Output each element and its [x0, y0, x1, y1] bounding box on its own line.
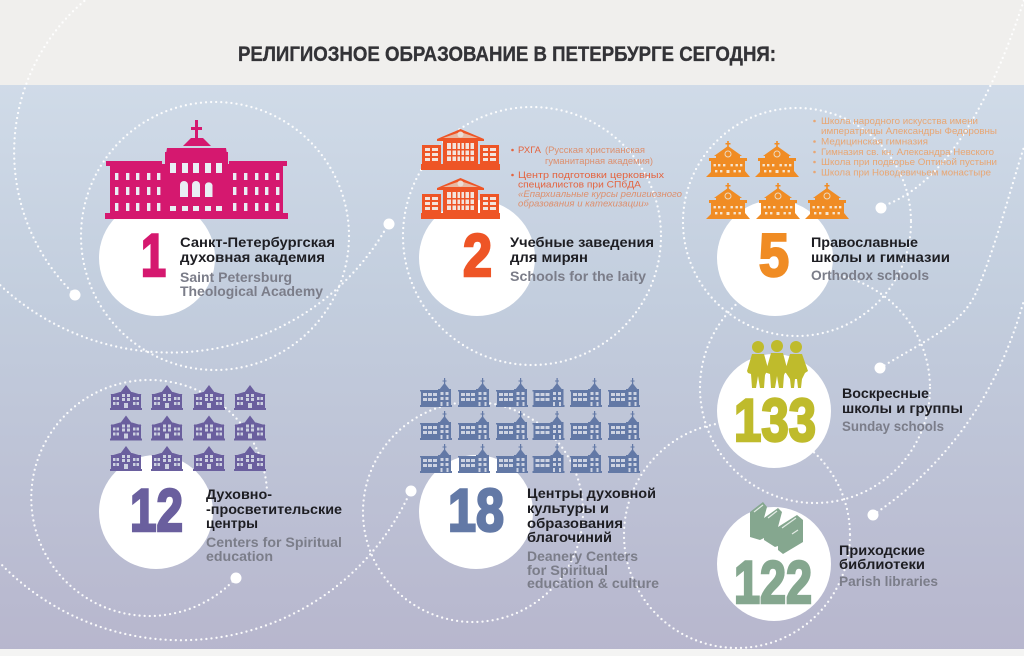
list: orthodox schools: Гимназия св. кн. Александра Невского: [821, 147, 994, 158]
label: laity: Schools for the laity: [510, 268, 646, 284]
label: academy: [180, 234, 335, 299]
list: laity schools: гуманитарная академия): [545, 156, 653, 167]
label: laity: Учебные заведения: [510, 234, 654, 250]
label: libraries: [839, 542, 938, 589]
label: academy: Санкт-Петербургская: [180, 234, 335, 250]
label: libraries: библиотеки: [839, 556, 925, 572]
label: sunday: Sunday schools: [842, 418, 944, 434]
white circle 122: [717, 507, 831, 621]
list: laity schools: «Епархиальные курсы религиозного: [518, 189, 682, 200]
label: sunday: школы и группы: [842, 400, 963, 416]
label: orthodox: школы и гимназии: [811, 249, 950, 265]
label: centers: education: [206, 548, 273, 564]
label: orthodox: Православные: [811, 234, 918, 250]
label: academy: духовная академия: [180, 249, 325, 265]
orbit end dots: [70, 202, 886, 584]
number 2: 2: [463, 222, 492, 289]
icon: three children: [747, 340, 808, 388]
white circle 2: [419, 200, 535, 316]
label: deanery: культуры и: [527, 500, 609, 516]
icon: twelve buildings: [110, 385, 266, 471]
number 12: 12: [130, 477, 183, 544]
list: orthodox schools: Медицинская гимназия: [821, 136, 928, 148]
label: deanery: [527, 485, 659, 591]
panel: schools for the laity: [419, 129, 682, 316]
label: sunday: Воскресные: [842, 385, 929, 401]
label: centers: центры: [206, 515, 258, 531]
panel: spiritual education centers: [99, 385, 342, 569]
header band: [0, 0, 1024, 85]
white circle 5: [717, 200, 833, 316]
label: sunday: [842, 385, 963, 434]
icon: two school buildings: [421, 129, 500, 219]
white circle 12: [99, 455, 213, 569]
label: academy: Saint Petersburg: [180, 269, 292, 285]
icon: eighteen buildings: [420, 378, 640, 473]
list: orthodox schools: Школа народного искусства имени: [821, 116, 978, 127]
label: centers: Духовно-: [206, 486, 272, 502]
panel: sunday schools: [717, 340, 963, 468]
label: centers: [206, 486, 342, 564]
panel: orthodox schools: [706, 116, 997, 316]
label: deanery: благочиний: [527, 529, 612, 545]
list: laity schools: [511, 145, 682, 210]
label: academy: Theological Academy: [180, 283, 323, 299]
label: centers: Centers for Spiritual: [206, 534, 342, 550]
panel: deanery centers: [419, 378, 659, 591]
list: orthodox schools: Школа при Новодевичьем монастыре: [821, 168, 991, 178]
label: centers: -просветительские: [206, 501, 342, 517]
white circle 18: [419, 455, 533, 569]
icon: three books: [750, 502, 803, 554]
label: deanery: education & culture: [527, 575, 659, 591]
number 133: 133: [734, 387, 816, 454]
label: orthodox: Orthodox schools: [811, 267, 929, 283]
label: laity: [510, 234, 654, 284]
label: libraries: Parish libraries: [839, 573, 938, 589]
number 122: 122: [734, 549, 812, 616]
label: deanery: for Spiritual: [527, 562, 608, 578]
list: laity schools: РХГА: [518, 145, 542, 156]
list: orthodox schools: [813, 116, 997, 178]
label: laity: для мирян: [510, 249, 588, 265]
label: deanery: Центры духовной: [527, 485, 656, 501]
list: laity schools: образования и катехизации»: [518, 198, 649, 210]
number 18: 18: [448, 477, 504, 544]
number 1: 1: [141, 222, 166, 289]
bottom band: [0, 649, 1024, 656]
white circle 1: [99, 200, 215, 316]
list: laity schools: Центр подготовки церковных: [518, 170, 664, 181]
list: orthodox schools: Школа при подворье Оптиной пустыни: [821, 157, 997, 168]
label: libraries: Приходские: [839, 542, 925, 558]
title: РЕЛИГИОЗНОЕ ОБРАЗОВАНИЕ В ПЕТЕРБУРГЕ СЕГОДНЯ:: [238, 42, 776, 66]
white circle 133: [717, 354, 831, 468]
icon: five orthodox schools: [706, 141, 849, 219]
list: orthodox schools: императрицы Александры Федоровны: [821, 126, 997, 137]
label: deanery: образования: [527, 515, 623, 531]
icon: academy building: [105, 120, 288, 219]
list: laity schools: (Русская христианская: [545, 145, 645, 156]
panel: theological academy: [99, 120, 335, 316]
panel: parish libraries: [717, 502, 938, 621]
list: laity schools: специалистов при СПбДА: [518, 180, 642, 190]
label: orthodox: [811, 234, 950, 283]
label: deanery: Deanery Centers: [527, 548, 638, 564]
number 5: 5: [759, 222, 789, 289]
